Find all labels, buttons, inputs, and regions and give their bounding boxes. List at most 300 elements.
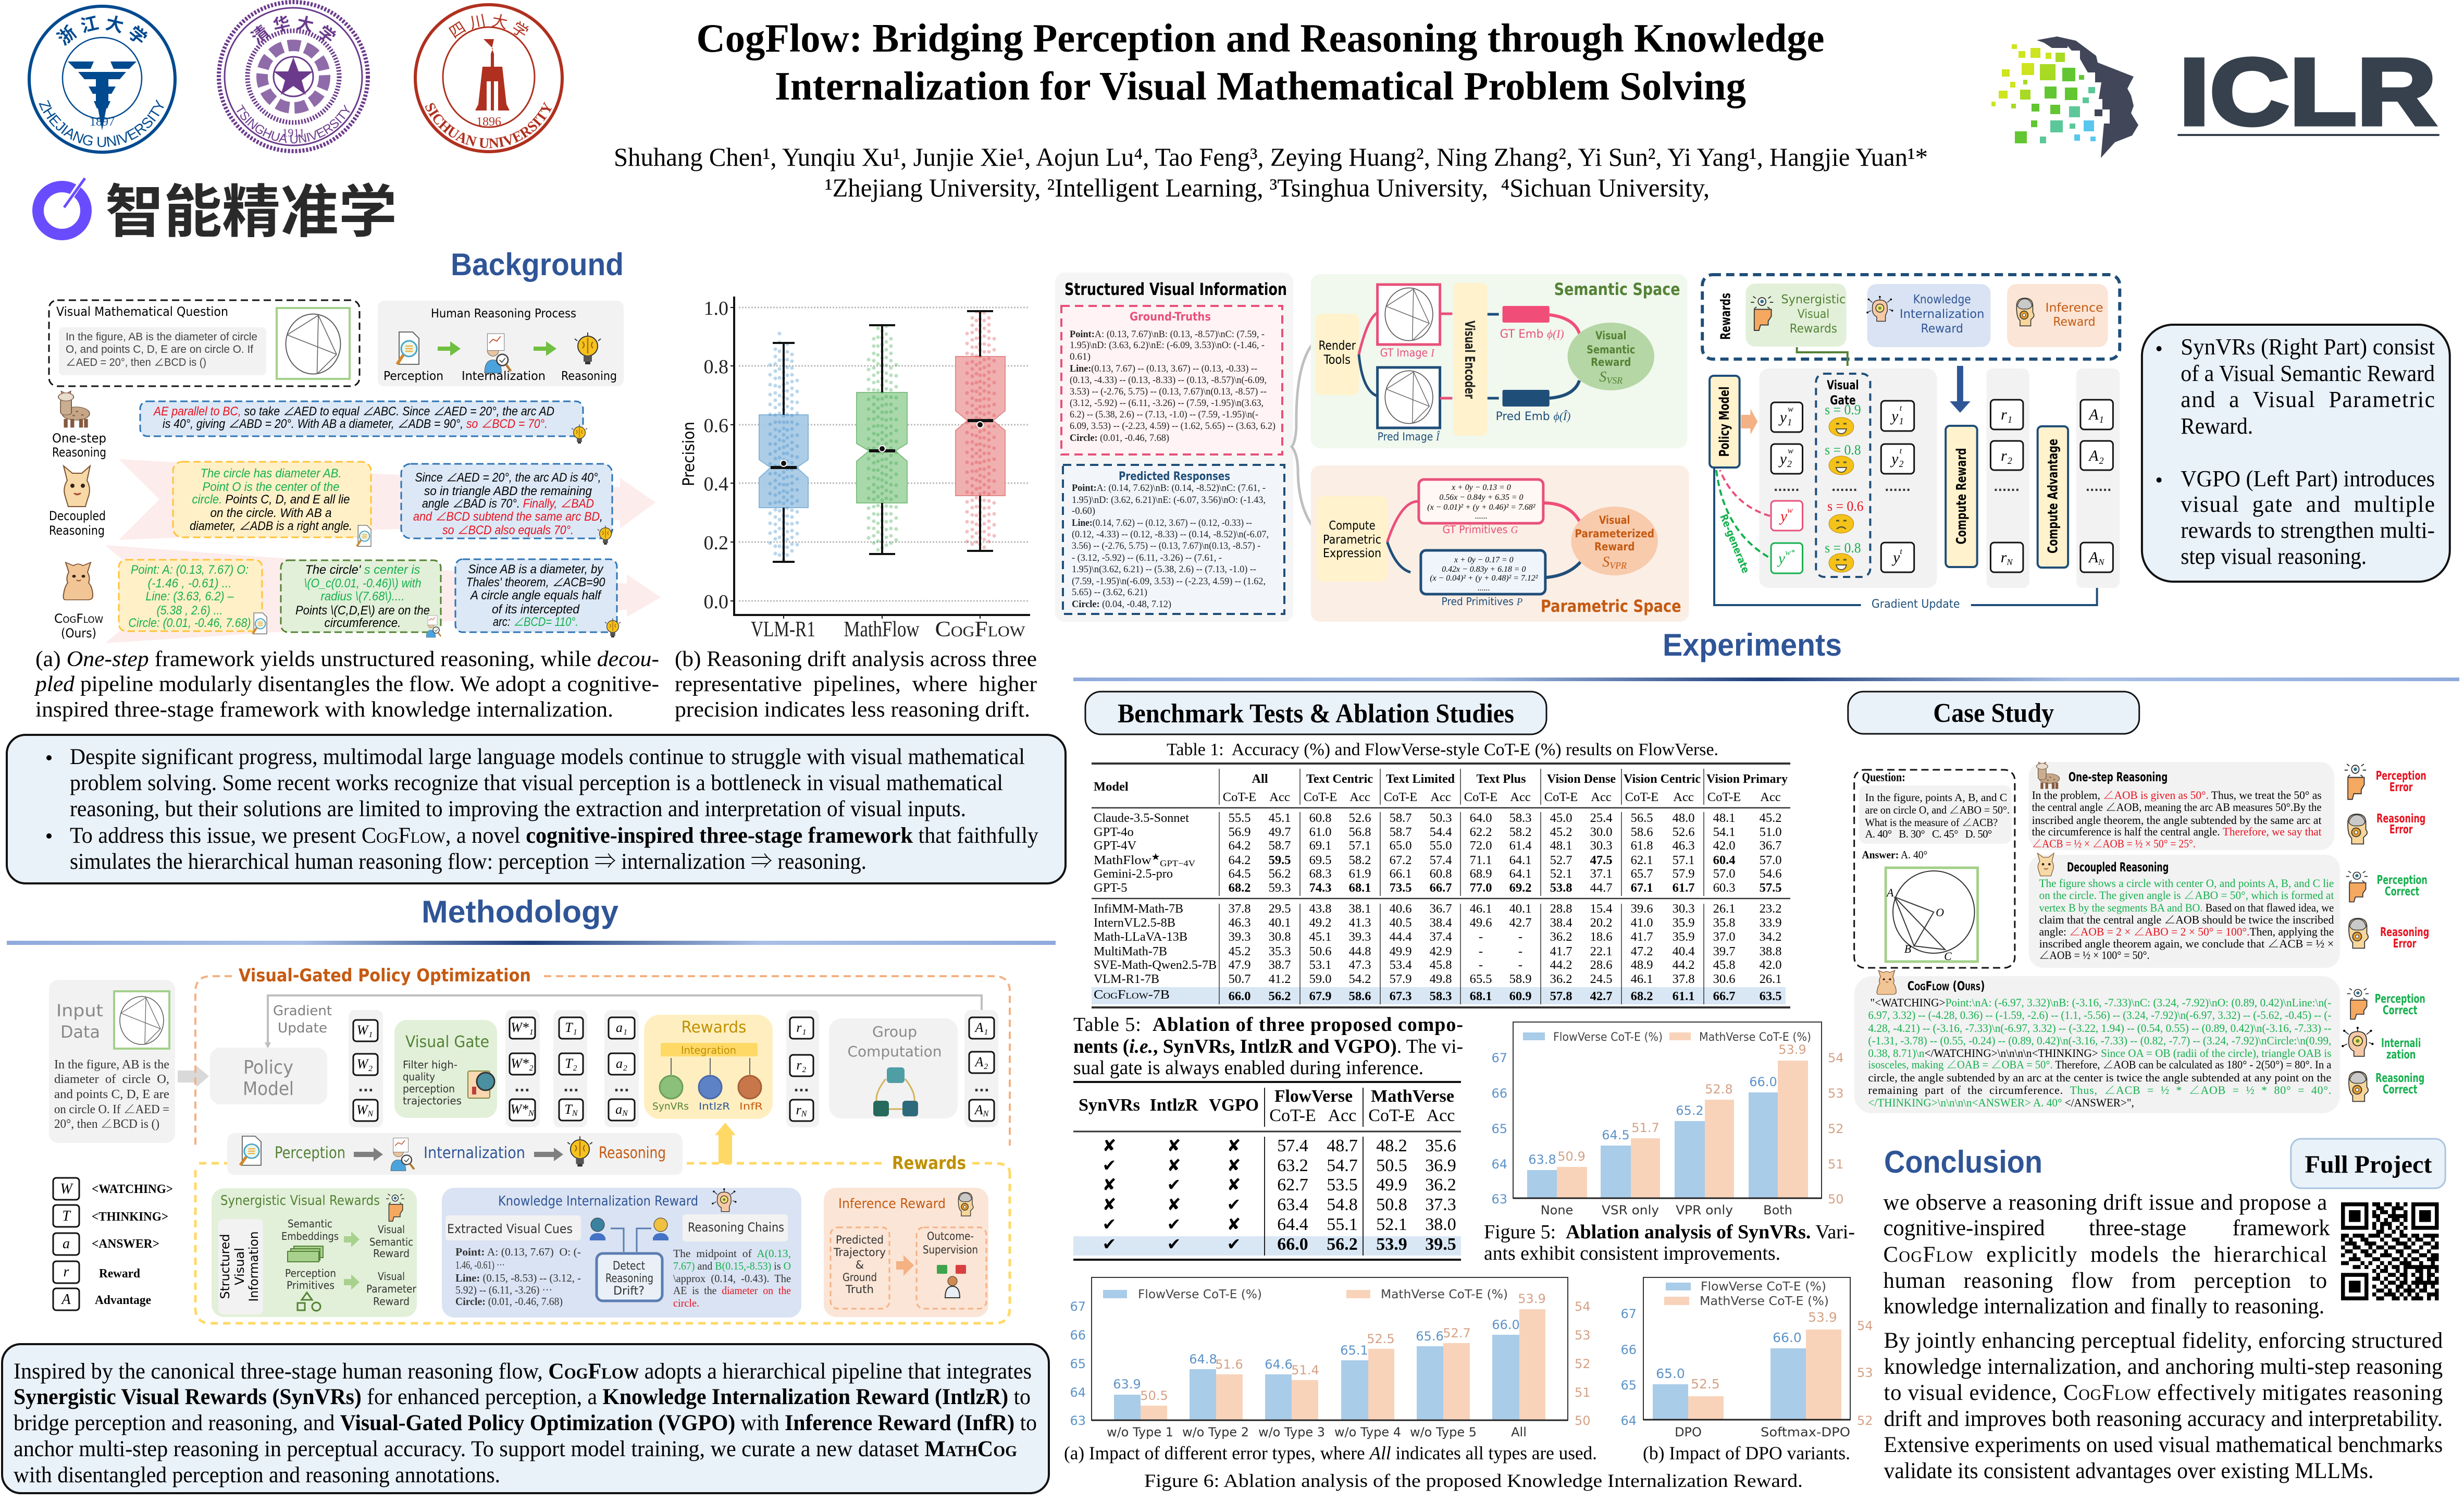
table 1: 41.7	[1631, 930, 1653, 944]
table 1: 64.2	[1229, 839, 1250, 853]
table 1: 35.8	[1713, 916, 1735, 930]
chart: figure 6a error types: 52.5	[1367, 1332, 1395, 1346]
chart: figure 5 SynVRs ablation: 67	[1491, 1051, 1507, 1065]
box: MathFlow	[857, 325, 907, 554]
table 1: 69.5	[1309, 853, 1331, 867]
title: Internalization for Visual Mathematical Problem Solving	[775, 64, 1746, 108]
visual gate: Visual Gate	[405, 1033, 489, 1051]
table 1: 62.1	[1631, 853, 1653, 867]
panel: question: A	[1886, 886, 1894, 899]
table 1: 58.7	[1269, 839, 1291, 853]
panel: cogflow reasoning: isosceles, making ∠OAB = ∠OBA = 50°. Therefore, ∠AOB can be calculated as 180° - 2(50°) = 80°. In a	[1868, 1058, 2332, 1071]
table 1: 58.6	[1349, 989, 1371, 1003]
panel: decoupled reasoning	[2029, 853, 2340, 968]
table 1: 49.9	[1390, 944, 1411, 958]
panel: semantic space: Render	[1319, 338, 1356, 353]
gradient update path: Gradient Update	[1872, 598, 1960, 611]
table 1: 28.8	[1550, 902, 1572, 916]
table 1: 45.1	[1309, 930, 1331, 944]
rewards block: Rewards	[682, 1018, 746, 1037]
table 5: 57.4	[1277, 1136, 1308, 1155]
table 1: 58.2	[1509, 825, 1531, 839]
callout: SynVRs and VGPO	[2142, 325, 2450, 582]
panel: rewards overview: Reward	[2053, 315, 2096, 329]
table 1: 55.0	[1430, 839, 1452, 853]
table 1: 54.6	[1760, 867, 1781, 881]
panel: knowledge internalization reward	[442, 1188, 801, 1318]
table 1: 72.0	[1470, 839, 1492, 853]
decoupled row: Decoupled	[49, 509, 106, 523]
chart: figure 6a error types: 53.9	[1518, 1291, 1546, 1306]
rewards block: SynVRs	[652, 1101, 689, 1112]
table 5: 53.9	[1376, 1235, 1407, 1254]
compute advantage	[2038, 426, 2068, 568]
heading: Experiments: Experiments	[1663, 628, 1842, 662]
panel: knowledge internalization reward: Line: (0.15, -8.53) -- (3.12, -	[455, 1272, 581, 1284]
chart: figure 6a error types: 64.8	[1189, 1352, 1217, 1367]
panel: question: C	[1944, 950, 1952, 963]
QR code	[2341, 1202, 2438, 1300]
cogflow row: circumference.	[324, 616, 401, 630]
token columns: A	[975, 1102, 983, 1117]
token columns: W*₂	[511, 1056, 534, 1071]
tokens: y	[1893, 549, 1900, 566]
table 1: 49.2	[1309, 916, 1331, 930]
cogflow row	[54, 559, 621, 641]
panel: parametric space: Pred Primitives P	[1442, 596, 1522, 608]
panel: inference reward	[824, 1188, 988, 1317]
rewards block: InfR	[739, 1101, 763, 1112]
panel: question	[1854, 770, 2015, 968]
text: conclusion paragraph 2: drift and improves both reasoning accuracy and interpretability.	[1884, 1407, 2443, 1431]
chart: figure 6a error types: FlowVerse CoT-E (%)	[1138, 1288, 1262, 1301]
table 1: GPT-4o	[1094, 825, 1134, 839]
panel: cogflow reasoning: 0.38, 8.71)\n</WATCHING>\n\n\n\n<THINKING> Since OA = OB (radii of the circle), triangle OAB is	[1868, 1047, 2331, 1060]
panel: inference reward: Supervision	[923, 1244, 978, 1256]
decoupled row	[49, 462, 613, 546]
table 1: 51.0	[1760, 825, 1781, 839]
logo: Sichuan University seal	[414, 3, 564, 153]
chart: figure 6b DPO variants: 64	[1620, 1413, 1637, 1428]
panel: synergistic visual rewards: Perception	[285, 1267, 336, 1279]
table 1: Acc	[1760, 790, 1781, 804]
tokens: t	[1900, 404, 1902, 413]
table 5: FlowVerse	[1274, 1087, 1353, 1106]
case study status icons: Perception	[2377, 873, 2428, 887]
panel: method summary: Synergistic Visual Rewards (SynVRs) for enhanced perception, a Knowledge Internalization Reward (IntlzR) to	[14, 1385, 1031, 1409]
table 1: 41.0	[1631, 916, 1653, 930]
panel: framework figure (a)	[49, 300, 661, 643]
logo: ICLR	[1991, 36, 2440, 158]
panel: parametric space: Parameterized	[1575, 527, 1654, 540]
table 1: Model	[1094, 780, 1129, 794]
table 1: 40.1	[1509, 902, 1531, 916]
table 1: 26.1	[1713, 902, 1735, 916]
predicted responses	[1063, 465, 1284, 614]
table 1: 68.3	[1309, 867, 1331, 881]
token columns: T	[564, 1102, 572, 1117]
table 1: 36.2	[1550, 930, 1572, 944]
table 1: 66.1	[1390, 867, 1411, 881]
panel: synergistic visual rewards: Visual	[378, 1270, 405, 1283]
text: conclusion paragraph 2	[1884, 1328, 2443, 1483]
chart: figure 5 SynVRs ablation: VSR only	[1602, 1203, 1659, 1217]
perception internalization reasoning bar: Internalization	[424, 1144, 525, 1162]
table 1: 45.2	[1760, 811, 1781, 825]
table 1: 58.6	[1631, 825, 1653, 839]
rewards dashed frame	[195, 1153, 1010, 1323]
predicted responses: Circle: (0.04, -0.48, 7.12)	[1072, 599, 1171, 610]
case study status icons: zation	[2386, 1048, 2416, 1062]
cogflow row: (-1.46 , -0.61) ...	[148, 576, 231, 590]
case study status icons: Reasoning	[2376, 812, 2425, 826]
panel: question: O	[1936, 906, 1944, 919]
table 1: 30.3	[1673, 902, 1694, 916]
table 1: 77.0	[1470, 881, 1492, 895]
table 1: 36.7	[1430, 902, 1452, 916]
table 1: Gemini-2.5-pro	[1094, 867, 1173, 881]
panel: knowledge internalization reward: Reasoning Chains	[688, 1220, 784, 1235]
panel: visual gated policy	[1710, 368, 2120, 611]
table 1: 63.5	[1760, 989, 1781, 1003]
chart: figure 6a error types: 50	[1575, 1413, 1591, 1428]
table 5: ✘	[1167, 1136, 1181, 1155]
visual mathematical question	[49, 300, 360, 386]
table 1: 44.8	[1349, 944, 1371, 958]
table 1: 37.8	[1229, 902, 1250, 916]
caption (a)	[34, 647, 659, 722]
table 5: IntlzR	[1149, 1096, 1198, 1115]
table 1: 62.2	[1470, 825, 1492, 839]
gradient update path	[1714, 468, 2097, 611]
table 5: Table 5: Ablation of three proposed compo-	[1073, 1014, 1463, 1036]
table 1: CoT-E	[1625, 790, 1658, 804]
decoupled row: The circle has diameter AB.	[200, 466, 342, 481]
table 1: 20.2	[1590, 916, 1612, 930]
table 1: 64.2	[1229, 853, 1250, 867]
panel: rewards overview: Internalization	[1900, 307, 1985, 321]
panel: parametric space: ......	[1478, 584, 1490, 593]
chart: figure 6a error types: w/o Type 1	[1107, 1425, 1173, 1440]
policy model	[210, 1048, 327, 1104]
table 1: Acc	[1510, 790, 1531, 804]
table 1: 40.5	[1390, 916, 1411, 930]
table 1: Text Limited	[1386, 772, 1455, 786]
compute reward: Compute Reward	[1954, 448, 1970, 544]
token columns: a	[615, 1102, 622, 1117]
panel: rewards overview: Knowledge	[1913, 293, 1971, 306]
table 1: 57.0	[1713, 867, 1735, 881]
panel: parametric space: x + 0y − 0.13 = 0	[1451, 483, 1511, 492]
table 1: 38.4	[1550, 916, 1572, 930]
case study status icons: Reasoning	[2380, 926, 2429, 939]
chart: figure 6a error types: 64	[1070, 1385, 1086, 1400]
chart: figure 6a error types: 67	[1070, 1299, 1086, 1314]
table 1: 30.3	[1590, 839, 1612, 853]
tokens: y₁	[1780, 409, 1792, 426]
table 1: 44.2	[1673, 958, 1694, 972]
chart: figure 5 SynVRs ablation: 66	[1491, 1086, 1507, 1101]
panel: question: In the figure, points A, B, and C	[1865, 791, 2007, 804]
tokens: ......	[1885, 481, 1911, 494]
one-step row: Reasoning	[52, 445, 106, 460]
panel: synergistic visual rewards: Information	[246, 1231, 261, 1302]
tokens: A	[2089, 549, 2098, 566]
heading: Background: Background	[451, 247, 624, 282]
table 1: 54.2	[1349, 972, 1371, 986]
panel: parametric space: x + 0y − 0.17 = 0	[1454, 556, 1514, 564]
decoupled row: Reasoning	[49, 523, 105, 538]
vgpo dashed frame: Visual-Gated Policy Optimization	[239, 965, 531, 986]
panel: semantic space: GT Emb ϕ(I)	[1500, 327, 1564, 341]
tokens: ......	[1831, 481, 1858, 494]
table 1: 42.9	[1430, 944, 1452, 958]
table 5: 64.4	[1277, 1215, 1308, 1234]
chart: figure 6b DPO variants: MathVerse CoT-E (%)	[1700, 1295, 1829, 1308]
table 1: 47.2	[1631, 944, 1653, 958]
rewards block: Integration	[681, 1044, 736, 1056]
table 5: MathVerse	[1371, 1087, 1454, 1106]
chart: figure 6b DPO variants: 66	[1620, 1343, 1637, 1357]
panel: cogflow reasoning: </THINKING>\n\n\n\n<ANSWER> A. 40° </ANSWER>",	[1868, 1096, 2134, 1109]
text: conclusion paragraph 1: knowledge internalization and finally to reasoning.	[1884, 1294, 2324, 1319]
panel: inference reward: Predicted	[836, 1234, 884, 1246]
table 1: Vision Centric	[1624, 772, 1701, 786]
panel: knowledge internalization reward: Knowledge Internalization Reward	[498, 1194, 698, 1209]
table 5: ✘	[1227, 1175, 1241, 1195]
input data: diameter of circle O,	[54, 1073, 169, 1086]
chart: figure 5 SynVRs ablation: 52	[1828, 1122, 1844, 1136]
token columns: W*₁	[511, 1020, 534, 1035]
chart: precision box plot (b): 0.4	[703, 473, 728, 495]
table 1: 42.7	[1590, 989, 1612, 1003]
table 1: 74.3	[1309, 881, 1331, 895]
panel: question: What is the measure of ∠ACB?	[1865, 816, 1998, 829]
group computation: Group	[872, 1023, 917, 1040]
panel: inference reward: Ground	[843, 1271, 877, 1284]
title	[696, 16, 1825, 108]
panel: semantic space: Visual Encoder	[1462, 321, 1477, 399]
table 5: 36.2	[1425, 1175, 1456, 1195]
case study status icons: Error	[2389, 781, 2413, 794]
table 1: 65.7	[1631, 867, 1653, 881]
logo: Tsinghua University seal: TSINGHUA UNIVERSITY	[237, 104, 350, 144]
rewards dashed frame: Rewards	[892, 1153, 966, 1174]
table 1: 57.0	[1760, 853, 1781, 867]
case study status icons	[2342, 764, 2429, 1101]
arrow: brace to spaces	[1292, 343, 1323, 537]
tokens: y	[1778, 550, 1785, 567]
table 1: 57.1	[1349, 839, 1371, 853]
logo: Zhejiang University seal: 浙 江 大 学	[56, 16, 148, 46]
chart: precision box plot (b): 0.2	[703, 532, 728, 554]
table 1: 45.8	[1713, 958, 1735, 972]
table 1: 26.1	[1760, 972, 1781, 986]
panel: cogflow reasoning: 6.97, 3.32) -- (-4.28, 0.36) -- (-1.59, -2.6) -- (1.1, -5.56) -- (3.24, -7.92)\n(-6.97, 3.32) -- (-5.62, -0.45) -- (-	[1868, 1008, 2331, 1022]
text: conclusion paragraph 2: to visual evidence, CogFlow effectively mitigates reasoning	[1884, 1381, 2443, 1405]
panel: semantic space: Tools	[1323, 352, 1351, 367]
caption (b): (b) Reasoning drift analysis across three	[675, 647, 1037, 671]
table 1: 68.1	[1349, 881, 1371, 895]
tokens: r₂	[2001, 447, 2012, 464]
chart: figure 5 SynVRs ablation: 51.7	[1631, 1121, 1660, 1135]
ground truths: Circle: (0.01, -0.46, 7.68)	[1070, 433, 1169, 444]
panel: decoupled reasoning: inscribed angle theorem again, we conclude that ∠ACB = ½ ×	[2039, 937, 2334, 950]
panel: method summary	[2, 1344, 1049, 1493]
token columns: N	[572, 1109, 578, 1118]
panel: parametric space: Compute	[1329, 519, 1376, 533]
panel: semantic space: Semantic	[1587, 343, 1635, 356]
table 5: sual gate is always enabled during inference.	[1073, 1057, 1423, 1079]
table 5: Acc	[1427, 1106, 1455, 1125]
table 1: Claude-3.5-Sonnet	[1094, 811, 1189, 825]
tokens: t	[1900, 547, 1902, 556]
table 1: 40.4	[1673, 944, 1694, 958]
text: conclusion paragraph 1: we observe a reasoning drift issue and propose a	[1884, 1190, 2327, 1215]
caption: figure 5: ants exhibit consistent improvements.	[1484, 1242, 1780, 1264]
panel: parametric space: (x − 0.01)² + (y + 0.46)² = 7.68²	[1427, 503, 1536, 512]
table 1: 25.4	[1590, 811, 1612, 825]
table 5: SynVRs	[1079, 1096, 1140, 1115]
table 1: 53.8	[1550, 881, 1572, 895]
chart: figure 6a error types: 51.4	[1291, 1363, 1319, 1377]
perception internalization reasoning bar: Reasoning	[599, 1144, 666, 1162]
table 5: 54.8	[1327, 1195, 1358, 1214]
token columns: N	[528, 1109, 535, 1118]
chart: figure 5 SynVRs ablation: MathVerse CoT-E (%)	[1699, 1031, 1811, 1044]
visual gate	[1816, 374, 1870, 577]
panel: one-step reasoning	[2029, 762, 2334, 850]
panel: inference reward: Inference Reward	[838, 1196, 946, 1212]
visual gate: s = 0.6	[1827, 498, 1864, 514]
table 1: 60.8	[1309, 811, 1331, 825]
table 1: 47.3	[1349, 958, 1371, 972]
case study status icons: Perception	[2375, 992, 2425, 1006]
panel: rewards overview: Synergistic	[1781, 293, 1846, 306]
decoupled row: Since ∠AED = 20°, the arc AD is 40°,	[415, 471, 601, 485]
table 1: 45.2	[1550, 825, 1572, 839]
table 1: 67.2	[1390, 853, 1411, 867]
panel: decoupled reasoning: ∠AOB = ½ × 100° = 50°.	[2039, 949, 2150, 962]
policy model	[1710, 376, 1740, 467]
table 1: 22.1	[1590, 944, 1612, 958]
table 1: Math-LLaVA-13B	[1094, 930, 1187, 944]
table 1: MathFlow	[1094, 853, 1147, 867]
chart: figure 6a error types: 50.5	[1140, 1388, 1168, 1403]
ground truths: Ground-Truths	[1130, 311, 1211, 324]
table 1: CoT-E	[1544, 790, 1578, 804]
chart: figure 6a error types: 63.9	[1113, 1377, 1141, 1392]
case study status icons: Correct	[2385, 885, 2419, 899]
table 1: SVE-Math-Qwen2.5-7B	[1094, 958, 1217, 972]
chart: figure 5 SynVRs ablation: 63	[1491, 1192, 1507, 1207]
table 1: 64.5	[1229, 867, 1250, 881]
chart: figure 5 SynVRs ablation: 54	[1828, 1051, 1844, 1065]
chart: figure 5 SynVRs ablation: 53.9	[1778, 1042, 1806, 1057]
chart: figure 6a error types: 66	[1070, 1328, 1086, 1343]
table 1: 42.0	[1760, 958, 1781, 972]
table 5: ✔	[1103, 1234, 1116, 1254]
table 1: 56.9	[1229, 825, 1250, 839]
table 1: 53.4	[1390, 958, 1411, 972]
table 1: Vision Dense	[1547, 772, 1616, 786]
table 1: 40.6	[1390, 902, 1411, 916]
text: conclusion paragraph 1: framework	[2233, 1216, 2330, 1240]
text: conclusion paragraph 1	[1884, 1190, 2330, 1319]
panel: one-step reasoning: the central angle ∠AOB, meaning the arc AB measures 50°.By the	[2032, 801, 2322, 814]
table 1: 46.1	[1470, 902, 1492, 916]
caption (b)	[675, 647, 1037, 722]
panel: rewards overview: Visual	[1798, 307, 1829, 321]
ground truths: 6.2) -- (5.38, 2.6) -- (7.13, -1.0) -- (7.59, -1.95)\n(-	[1070, 409, 1258, 420]
table 5: 37.3	[1425, 1195, 1456, 1214]
table 1: 60.9	[1509, 989, 1531, 1003]
panel: rewards overview	[1702, 275, 2120, 366]
panel: methodology diagram	[49, 965, 1010, 1323]
visual gate: perception	[403, 1082, 455, 1095]
compute advantage: Compute Advantage	[2045, 439, 2061, 553]
table 1: 52.6	[1349, 811, 1371, 825]
table 1: 35.9	[1673, 930, 1694, 944]
chart: figure 6a error types	[1070, 1277, 1591, 1440]
panel: semantic space: Semantic Space	[1554, 279, 1680, 299]
table 1: 35.9	[1673, 916, 1694, 930]
visual mathematical question: In the figure, AB is the diameter of circle	[66, 331, 257, 343]
heading: benchmark tests: Benchmark Tests & Ablation Studies	[1118, 699, 1514, 729]
table 1: 45.8	[1430, 958, 1452, 972]
predicted responses: (0.12, -4.33) -- (0.12, -8.33) -- (0.14, -8.52)\n(-6.07,	[1072, 529, 1269, 540]
caption (b): precision indicates less reasoning drift.	[675, 698, 1030, 722]
table 1: 57.8	[1550, 989, 1572, 1003]
panel: knowledge internalization reward: \approx (0.14, -0.43). The	[673, 1272, 791, 1285]
table 5: 49.9	[1376, 1175, 1407, 1195]
table 1: 23.2	[1760, 902, 1781, 916]
table 1: 39.6	[1631, 902, 1653, 916]
chart: figure 5 SynVRs ablation	[1491, 1022, 1844, 1217]
table 1: 58.3	[1509, 811, 1531, 825]
token columns: A₂	[974, 1054, 988, 1069]
table 1: 49.7	[1269, 825, 1291, 839]
human reasoning process: Perception	[383, 370, 443, 383]
case study status icons: Reasoning	[2375, 1072, 2424, 1085]
tokens: ......	[1774, 481, 1800, 494]
table 1: 47.9	[1229, 958, 1250, 972]
panel: synergistic visual rewards: Semantic	[288, 1217, 332, 1230]
tokens: w	[1787, 506, 1793, 515]
predicted responses: 1.95)\nD: (3.62, 6.21)\nE: (-6.07, 3.56)\nO: (-1.43,	[1072, 495, 1266, 506]
table 5: CoT-E	[1269, 1106, 1316, 1125]
box: CogFlow	[956, 311, 1005, 551]
table 1: 58.9	[1509, 972, 1531, 986]
table 1: 30.8	[1269, 930, 1291, 944]
token columns: N	[801, 1110, 808, 1118]
table 1: 52.1	[1550, 867, 1572, 881]
chart: figure 5 SynVRs ablation: 53	[1828, 1086, 1844, 1101]
panel: cogflow reasoning: 4.28, -4.21) -- (-3.16, -7.33)\n(-6.97, 3.32) -- (-3.22, 1.94) -- (0.54, 0.55) -- (0.89, 0.42)\n(-3.16, -7.33) --	[1868, 1022, 2331, 1035]
panel: question: B	[1904, 942, 1911, 955]
table 1: 61.1	[1673, 989, 1694, 1003]
button: full project: Full Project	[2305, 1151, 2432, 1178]
chart: figure 6a error types: 65.1	[1340, 1343, 1368, 1358]
text: conclusion paragraph 1: cognitive-inspired	[1884, 1216, 2045, 1240]
heading: case study	[1848, 692, 2139, 734]
panel: synergistic visual rewards: Visual	[232, 1248, 247, 1285]
table 1: 36.2	[1550, 972, 1572, 986]
chart: figure 6a error types: 65	[1070, 1357, 1086, 1371]
panel: cogflow reasoning: remaining part of the circumference. Thus, ∠ACB = ½ * ∠AOB = ½ * 80° = 40°.	[1868, 1084, 2331, 1097]
logo: Zhejiang University seal	[28, 5, 177, 154]
panel: synergistic visual rewards: Parameter	[366, 1283, 417, 1295]
